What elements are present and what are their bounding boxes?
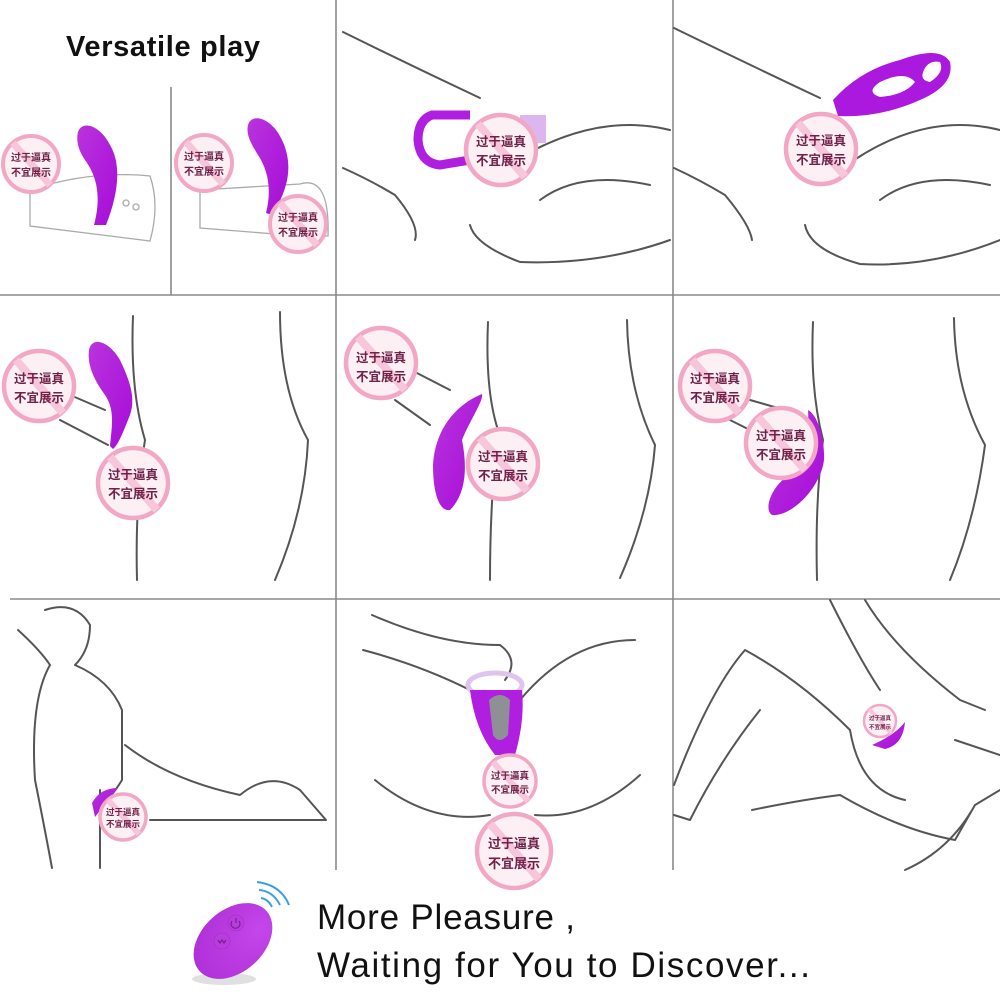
badge: 不宜展示 (106, 819, 140, 829)
badge: 过于逼真 (756, 428, 806, 443)
badge: 不宜展示 (796, 152, 846, 167)
caption text (317, 898, 810, 985)
product ring (468, 673, 522, 697)
product shape 2 (247, 118, 288, 215)
product (89, 342, 132, 449)
product (872, 722, 905, 749)
product metal panel (489, 695, 510, 740)
panel: middle-right (730, 318, 985, 580)
badge (680, 351, 750, 421)
panel: bottom-left figures (18, 607, 326, 868)
panel: bottom-middle (363, 615, 640, 817)
badge (466, 115, 536, 185)
badge: 不宜展示 (476, 153, 526, 168)
badge: 过于逼真 (14, 371, 64, 386)
product ring top (833, 53, 951, 116)
badge: 不宜展示 (278, 226, 318, 239)
product ring (418, 115, 470, 165)
product (433, 394, 482, 510)
badge: 不宜展示 (478, 468, 528, 483)
badge: 不宜展示 (356, 369, 406, 384)
badge: 过于逼真 (488, 836, 540, 851)
badge (786, 114, 856, 184)
panel: middle-left (60, 312, 308, 580)
badge: 不宜展示 (756, 447, 806, 462)
badge: 过于逼真 (11, 151, 51, 164)
badge (746, 408, 816, 478)
icon: wireless waves (257, 882, 289, 907)
panel: top-right outline (674, 28, 1000, 264)
badge: 不宜展示 (14, 390, 64, 405)
badge: 过于逼真 (476, 134, 526, 149)
badge: 不宜展示 (184, 165, 224, 178)
product (768, 410, 824, 515)
badge: 过于逼真 (869, 714, 891, 722)
product (92, 788, 118, 817)
badge: 不宜展示 (690, 390, 740, 405)
panel: middle-center (395, 320, 655, 580)
badge (864, 705, 896, 737)
panel: top-left diagrams (30, 118, 328, 241)
badge: 过于逼真 (491, 770, 529, 782)
badge (98, 448, 168, 518)
caption text: Waiting for You to Discover... (317, 946, 810, 985)
icon: remote control (179, 882, 289, 994)
title: Versatile play (66, 31, 260, 63)
badge (3, 136, 59, 192)
badge: 过于逼真 (184, 150, 224, 163)
badge: 过于逼真 (478, 449, 528, 464)
badge (4, 351, 74, 421)
badge: 不宜展示 (491, 784, 529, 796)
badge (477, 814, 551, 888)
panel: bottom-right figures (674, 600, 1000, 870)
badge: 过于逼真 (690, 371, 740, 386)
badge: 过于逼真 (278, 211, 318, 224)
badge (468, 429, 538, 499)
badge: 过于逼真 (796, 133, 846, 148)
product shape 1 (77, 126, 117, 225)
badge (484, 755, 536, 807)
badge: 不宜展示 (11, 166, 51, 179)
badge: 不宜展示 (108, 486, 158, 501)
badge: 不宜展示 (488, 856, 540, 871)
badge (270, 196, 326, 252)
badge: 过于逼真 (108, 467, 158, 482)
badge (176, 135, 232, 191)
caption text: More Pleasure , (317, 898, 575, 937)
panel: top-middle outline (343, 32, 670, 262)
product body (470, 690, 523, 755)
badge: 过于逼真 (106, 807, 140, 817)
badge: 不宜展示 (869, 723, 891, 731)
badge (346, 328, 416, 398)
badge (100, 794, 146, 840)
badge: 过于逼真 (356, 350, 406, 365)
